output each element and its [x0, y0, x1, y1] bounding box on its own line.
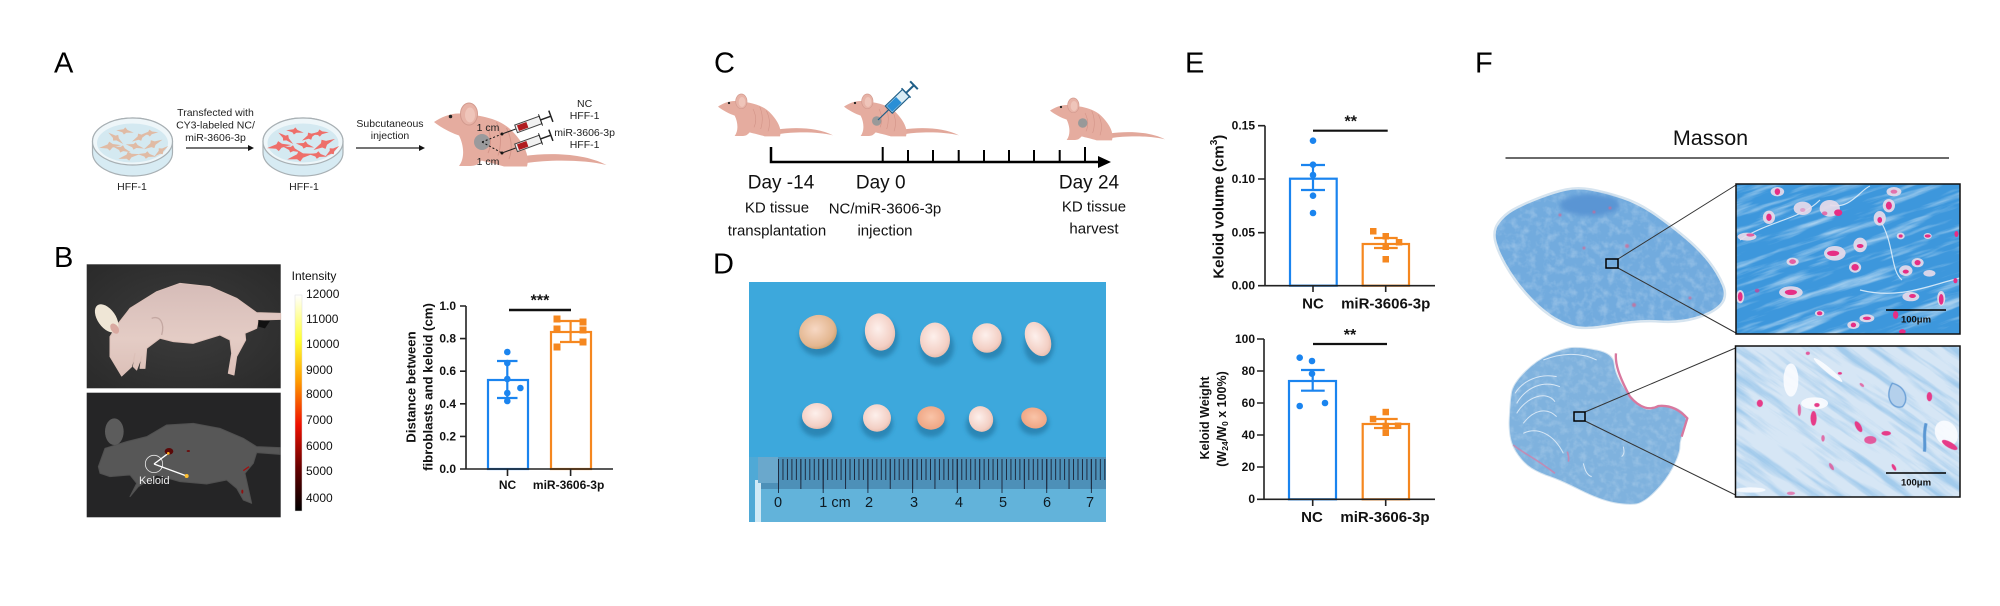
- color scale bar: 7000: [306, 413, 333, 427]
- bar chart: keloid volume: 0.10: [1232, 172, 1255, 186]
- heading C: C: [714, 48, 735, 80]
- color scale bar: 10000: [306, 337, 340, 351]
- zoom region marker: miR-3606-3p: [1574, 348, 1736, 495]
- text: injection step: [356, 118, 424, 142]
- bar chart: keloid volume: 0.15: [1232, 119, 1255, 133]
- timepoint: day -14: KD tissue: [745, 200, 809, 216]
- text: injection step: injection: [371, 130, 409, 142]
- label HFF-1: HFF-1: [117, 181, 147, 193]
- panel A: cell transfection workflow: [54, 48, 615, 193]
- micrograph: NC high magnification: 100μm: [1901, 314, 1931, 326]
- timepoint: day 24: Day 24: [1059, 172, 1120, 194]
- panel E: keloid volume and weight charts: [1185, 48, 1435, 526]
- color scale bar: 12000: [306, 287, 340, 301]
- petri dish: CY3-labeled HFF-1: [263, 118, 343, 176]
- timepoint: day -14: Day -14: [748, 172, 815, 194]
- bar chart: distance between fibroblasts and keloid: fibroblasts and keloid (cm): [420, 303, 436, 471]
- ruler: 2: [865, 495, 873, 511]
- timepoint: day 0: [829, 172, 941, 240]
- tissue section: miR-3606-3p: [1509, 347, 1687, 504]
- arrow: injection: [356, 145, 425, 151]
- labels: injection groups: HFF-1: [570, 139, 600, 151]
- bar chart: keloid weight: /W: [1215, 426, 1229, 441]
- bar chart: keloid volume: Keloid volume (cm: [1210, 145, 1228, 279]
- labels: injection groups: [554, 98, 615, 151]
- bar chart: distance between fibroblasts and keloid: 0.0: [439, 462, 456, 476]
- bar chart: keloid weight: (W: [1215, 451, 1229, 467]
- micrograph: miR-3606-3p high magnification: 100μm: [1901, 478, 1931, 488]
- labels: injection groups: HFF-1: [570, 110, 600, 122]
- color scale bar: 6000: [306, 439, 333, 453]
- bar chart: distance between fibroblasts and keloid: 0.4: [439, 397, 456, 411]
- micrograph: miR-3606-3p high magnification: [1735, 346, 1962, 497]
- color scale bar: 5000: [306, 464, 333, 478]
- ruler: 6: [1043, 495, 1051, 511]
- photo: keloids on ruler: [749, 282, 1106, 522]
- panel F: Masson staining histology: [1475, 48, 1962, 504]
- timepoint: day 24: KD tissue: [1062, 198, 1126, 216]
- bar chart: keloid weight: 100: [1235, 332, 1255, 346]
- bar chart: keloid weight: 40: [1242, 428, 1255, 442]
- arrow: transfection: [186, 145, 254, 151]
- illustration: mouse with injections: [434, 103, 606, 168]
- timepoint: day 0: Day 0: [856, 172, 906, 194]
- heading F: F: [1475, 48, 1493, 80]
- heading D: D: [713, 248, 734, 280]
- label HFF-1: HFF-1: [289, 181, 319, 193]
- ruler: [749, 457, 1106, 522]
- color scale bar: 8000: [306, 387, 333, 401]
- color scale bar: 4000: [306, 491, 333, 505]
- heading A: A: [54, 48, 74, 80]
- illustration: mouse with injection at day 0: [844, 81, 959, 136]
- bar chart: keloid volume: 0.05: [1232, 226, 1255, 240]
- multi-panel figure: [54, 52, 1961, 525]
- bar chart: keloid weight: miR-3606-3p: [1340, 509, 1430, 526]
- text: transfection step: CY3-labeled NC/: [176, 120, 255, 132]
- bar chart: distance between fibroblasts and keloid: ***: [531, 292, 550, 310]
- heading E: E: [1185, 48, 1204, 80]
- heading B: B: [54, 242, 73, 274]
- bar chart: distance between fibroblasts and keloid: [404, 292, 613, 492]
- bar chart: keloid weight: [1198, 327, 1435, 526]
- color scale bar: 11000: [306, 312, 339, 326]
- ruler: 0: [774, 495, 782, 511]
- illustration: mouse with keloid at day 24: [1050, 98, 1165, 140]
- panel D: excised keloid photo: [713, 248, 1106, 522]
- bar chart: distance between fibroblasts and keloid: 1.0: [439, 299, 456, 313]
- color scale bar: [295, 287, 340, 511]
- text: transfection step: [176, 107, 255, 144]
- ruler: 5: [999, 495, 1007, 511]
- bar chart: keloid volume: 0.00: [1232, 279, 1255, 293]
- bar chart: keloid weight: Keloid Weight: [1198, 376, 1212, 460]
- timepoint: day 24: [1059, 172, 1126, 238]
- panel B: in vivo imaging and distance chart: [54, 242, 613, 517]
- bar chart: keloid weight: **: [1344, 327, 1357, 344]
- illustration: mouse with injections: 1 cm: [477, 122, 500, 134]
- label: Intensity: Intensity: [292, 269, 336, 283]
- labels: injection groups: miR-3606-3p: [554, 127, 615, 139]
- bar chart: keloid weight: 80: [1242, 364, 1255, 378]
- bar chart: keloid weight: x 100%): [1215, 371, 1229, 421]
- bar chart: keloid volume: miR-3606-3p: [1341, 296, 1430, 312]
- bar chart: keloid volume: [1208, 114, 1435, 312]
- timepoint: day 0: NC/miR-3606-3p: [829, 200, 941, 218]
- bar chart: keloid weight: 0: [1248, 492, 1255, 506]
- labels: injection groups: NC: [577, 98, 593, 110]
- bar chart: distance between fibroblasts and keloid: miR-3606-3p: [533, 478, 604, 492]
- bar chart: distance between fibroblasts and keloid: Distance between: [404, 331, 418, 443]
- panel C: experimental timeline: [714, 48, 1165, 240]
- timepoint: day -14: transplantation: [728, 222, 826, 240]
- bar chart: distance between fibroblasts and keloid: 0.8: [439, 332, 456, 346]
- bar chart: distance between fibroblasts and keloid: 0.6: [439, 364, 456, 378]
- bar chart: distance between fibroblasts and keloid: NC: [499, 478, 516, 492]
- ruler: 4: [955, 495, 963, 511]
- bar chart: keloid weight: 20: [1242, 460, 1255, 474]
- petri dish: untreated HFF-1: [92, 118, 172, 176]
- micrograph: NC high magnification: [1736, 184, 1960, 334]
- ruler: 3: [910, 495, 918, 511]
- photo: fluorescence imaging with keloid: Keloid: [139, 475, 170, 487]
- text: transfection step: Transfected with: [177, 107, 254, 119]
- bar chart: keloid volume: ): [1210, 135, 1228, 140]
- timepoint: day -14: [728, 172, 826, 240]
- excised keloid samples: [795, 311, 1056, 439]
- illustration: mouse at day -14: [718, 94, 833, 136]
- column title: Masson: Masson: [1673, 126, 1748, 150]
- bar chart: keloid volume: NC: [1302, 296, 1324, 312]
- text: injection step: Subcutaneous: [356, 118, 424, 130]
- photo: nude mouse: [87, 264, 281, 388]
- zoom region marker: NC: [1606, 185, 1736, 333]
- tissue section: NC: [1494, 188, 1725, 328]
- bar chart: keloid weight: 60: [1242, 396, 1255, 410]
- timepoint: day 0: injection: [857, 222, 913, 240]
- photo: fluorescence imaging with keloid: [87, 393, 281, 517]
- ruler: 1 cm: [819, 495, 851, 511]
- bar chart: keloid weight: 0: [1220, 421, 1230, 426]
- illustration: mouse with injections: 1 cm: [477, 156, 500, 168]
- bar chart: keloid volume: 3: [1208, 139, 1220, 145]
- color scale bar: 9000: [306, 363, 333, 377]
- bar chart: distance between fibroblasts and keloid: 0.2: [439, 429, 456, 443]
- timepoint: day 24: harvest: [1069, 220, 1119, 238]
- ruler: 7: [1086, 495, 1094, 511]
- bar chart: keloid volume: **: [1344, 114, 1358, 130]
- bar chart: keloid weight: 24: [1220, 441, 1230, 451]
- timeline arrow: [771, 147, 1111, 168]
- text: transfection step: miR-3606-3p: [185, 132, 246, 144]
- bar chart: keloid weight: NC: [1301, 509, 1323, 526]
